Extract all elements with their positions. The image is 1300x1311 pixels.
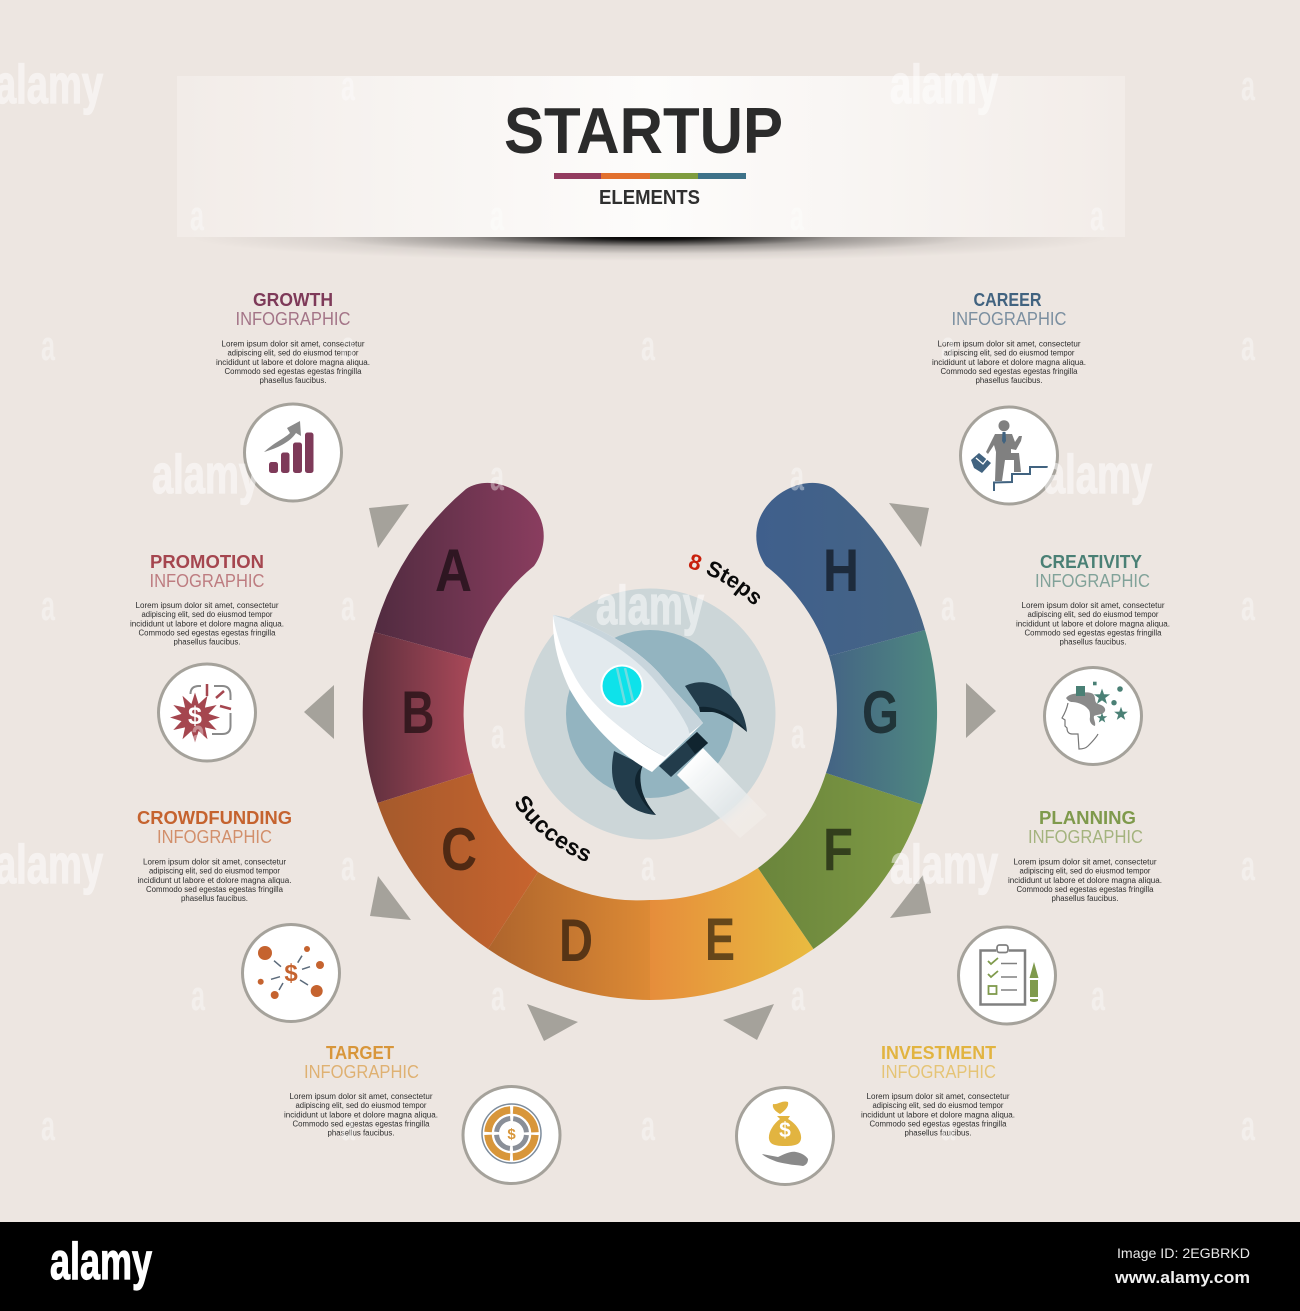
text block (130, 601, 284, 647)
image id: Image ID: 2EGBRKD (1117, 1245, 1250, 1261)
text block: Lorem ipsum dolor sit amet, consectetur (938, 340, 1081, 348)
heading: crowdfunding (137, 808, 292, 847)
text block: Lorem ipsum dolor sit amet, consectetur (1014, 858, 1157, 866)
watermarks: a (1241, 1102, 1255, 1149)
heading: growth (236, 290, 350, 329)
panel: investment (736, 1043, 1015, 1184)
icon: creative head (1044, 668, 1142, 764)
title: STARTUP (504, 94, 783, 167)
watermarks: a (790, 192, 804, 239)
icon: crowdfunding network: $ (284, 960, 298, 987)
text block: phasellus faucibus. (976, 376, 1042, 385)
banner panel (177, 76, 1125, 237)
lower fin (612, 751, 656, 815)
heading: creativity: CREATIVITY (1040, 552, 1142, 572)
watermarks: a (41, 1102, 55, 1149)
header banner (177, 76, 1125, 261)
icon: promotion burst: $ (188, 702, 202, 730)
heading: planning (1028, 808, 1143, 847)
watermarks: a (341, 322, 355, 369)
panel: career (932, 290, 1086, 504)
watermarks: a (941, 322, 955, 369)
curved label: Success: Success (516, 796, 590, 861)
colour bar (554, 173, 746, 179)
watermarks: a (1091, 972, 1105, 1019)
watermarks: a (191, 710, 205, 757)
text block: adipiscing elit, sed do eiusmod tempor (296, 1101, 427, 1110)
text block: phasellus faucibus. (1052, 894, 1118, 903)
inner disc (566, 630, 734, 798)
text block: Lorem ipsum dolor sit amet, consectetur (222, 340, 365, 348)
heading: planning: PLANNING (1039, 808, 1136, 828)
text block: incididunt ut labore et dolore magna aliqua. (1016, 619, 1170, 628)
heading: promotion: INFOGRAPHIC (150, 571, 264, 591)
letters: D (559, 907, 593, 974)
heading: investment: INFOGRAPHIC (881, 1062, 996, 1082)
text block: Commodo sed egestas egestas fringilla (224, 367, 362, 376)
text block: Commodo sed egestas egestas fringilla (292, 1120, 430, 1128)
panel: creativity (1016, 552, 1170, 764)
text block: phasellus faucibus. (174, 638, 240, 647)
watermarks: a (1241, 842, 1255, 889)
watermarks: a (1090, 192, 1104, 239)
nozzle (659, 732, 708, 777)
icon: clipboard (958, 927, 1056, 1024)
heading: target: TARGET (326, 1043, 394, 1063)
ring chart (363, 483, 937, 1000)
icon: money bag (736, 1088, 834, 1184)
letters: C (441, 816, 477, 883)
segment A (374, 483, 544, 659)
upper fin (685, 682, 747, 732)
heading: target (304, 1043, 419, 1082)
text block: phasellus faucibus. (1060, 638, 1126, 647)
heading: crowdfunding: CROWDFUNDING (137, 808, 292, 828)
heading: promotion: PROMOTION (150, 552, 264, 572)
footer bar (0, 1222, 1300, 1311)
outer disc (524, 588, 776, 840)
body shade (553, 615, 703, 757)
heading: growth: INFOGRAPHIC (236, 309, 350, 329)
panel: growth (216, 290, 370, 501)
watermarks: alamy (596, 574, 704, 636)
footer logo: alamy (50, 1233, 152, 1291)
icon: target: $ (507, 1126, 516, 1143)
text block (216, 340, 370, 385)
body face (553, 615, 690, 757)
watermarks: a (41, 322, 55, 369)
text block (1016, 601, 1170, 647)
text block: incididunt ut labore et dolore magna aliqua. (130, 619, 284, 628)
segment F (758, 773, 922, 949)
heading: creativity: INFOGRAPHIC (1035, 571, 1150, 591)
icon: career climb (960, 407, 1058, 504)
watermarks: a (791, 972, 805, 1019)
text block: adipiscing elit, sed do eiusmod tempor (944, 349, 1075, 358)
text block: Lorem ipsum dolor sit amet, consectetur (866, 1092, 1010, 1101)
text block: Commodo sed egestas egestas fringilla (1016, 885, 1154, 894)
watermarks: a (491, 710, 505, 757)
letters: H (823, 537, 859, 604)
text block: incididunt ut labore et dolore magna aliqua. (138, 876, 292, 885)
arrows (304, 503, 996, 1041)
icon: target (463, 1086, 560, 1184)
watermarks: a (341, 582, 355, 629)
watermarks: a (41, 582, 55, 629)
icon: growth chart (244, 404, 342, 501)
watermarks: a (790, 452, 804, 499)
icon: money bag: $ (779, 1119, 791, 1142)
heading: creativity (1035, 552, 1150, 591)
watermarks: a (341, 62, 355, 109)
text block (284, 1092, 438, 1138)
letters: B (402, 679, 434, 746)
website: www.alamy.com (1114, 1268, 1250, 1287)
text block: incididunt ut labore et dolore magna aliqua. (932, 358, 1086, 367)
text block: Commodo sed egestas egestas fringilla (870, 1120, 1007, 1128)
watermarks: a (641, 1102, 655, 1149)
text block: Commodo sed egestas egestas fringilla (1024, 628, 1162, 638)
heading: career: CAREER (974, 290, 1042, 310)
watermarks: alamy (152, 443, 260, 505)
text block: incididunt ut labore et dolore magna aliqua. (216, 358, 370, 367)
watermarks: a (191, 972, 205, 1019)
heading: career (952, 290, 1066, 329)
watermarks: a (341, 842, 355, 889)
watermarks: alamy (890, 833, 998, 895)
curved label: 8 Steps: 8 Steps (688, 554, 760, 604)
icon: crowdfunding network (242, 924, 340, 1022)
panel: planning (958, 808, 1162, 1024)
text block (138, 858, 292, 903)
heading: target: INFOGRAPHIC (304, 1062, 419, 1082)
heading: investment (881, 1043, 996, 1082)
watermarks: a (491, 972, 505, 1019)
letters: E (705, 906, 735, 973)
banner shadow (190, 237, 1110, 261)
watermarks: a (190, 192, 204, 239)
segment H (756, 483, 925, 656)
watermarks: a (941, 1102, 955, 1149)
text block: Commodo sed egestas egestas fringilla (146, 885, 284, 894)
porthole (600, 664, 644, 708)
watermarks: a (490, 452, 504, 499)
text block (1008, 858, 1162, 903)
text block: adipiscing elit, sed do eiusmod tempor (142, 610, 273, 619)
letters (402, 537, 899, 974)
text block: phasellus faucibus. (260, 376, 326, 385)
watermarks: a (941, 582, 955, 629)
text block: incididunt ut labore et dolore magna aliqua. (861, 1110, 1015, 1119)
text block: Lorem ipsum dolor sit amet, consectetur (136, 601, 279, 610)
watermarks: a (791, 710, 805, 757)
segment E (650, 868, 814, 1000)
text block: Commodo sed egestas egestas fringilla (940, 367, 1078, 376)
text block: Lorem ipsum dolor sit amet, consectetur (1022, 601, 1165, 610)
letters: A (435, 537, 472, 604)
heading: growth: GROWTH (253, 290, 333, 310)
center rocket illustration (524, 588, 776, 840)
text block: adipiscing elit, sed do eiusmod tempor (872, 1101, 1004, 1110)
text block: phasellus faucibus. (328, 1129, 394, 1138)
letters: G (862, 679, 899, 746)
text block: adipiscing elit, sed do eiusmod tempor (1028, 610, 1159, 619)
heading: planning: INFOGRAPHIC (1028, 827, 1143, 847)
icon: promotion burst (158, 664, 256, 761)
flame (677, 748, 767, 838)
heading: crowdfunding: INFOGRAPHIC (157, 827, 272, 847)
watermarks: a (641, 322, 655, 369)
heading: career: INFOGRAPHIC (952, 309, 1066, 329)
text block: Commodo sed egestas egestas fringilla (138, 628, 276, 638)
watermarks: alamy (890, 53, 998, 115)
panel: promotion (130, 552, 284, 761)
watermarks: a (341, 1102, 355, 1149)
segment C (378, 773, 538, 949)
watermarks: a (490, 192, 504, 239)
watermarks: alamy (1044, 443, 1152, 505)
segment D (488, 872, 650, 1000)
text block: adipiscing elit, sed do eiusmod tempor (228, 349, 359, 358)
heading: promotion (150, 552, 264, 591)
watermarks: a (641, 842, 655, 889)
watermarks: a (1241, 62, 1255, 109)
segment G (826, 630, 937, 804)
text block: phasellus faucibus. (904, 1129, 972, 1138)
letters: F (823, 816, 853, 883)
text block (932, 340, 1086, 385)
text block: phasellus faucibus. (181, 894, 248, 903)
panel: target (284, 1043, 560, 1184)
text block: Lorem ipsum dolor sit amet, consectetur (143, 858, 286, 866)
text block (861, 1092, 1015, 1138)
watermarks: a (1241, 582, 1255, 629)
watermarks: a (1241, 322, 1255, 369)
subtitle: ELEMENTS (599, 187, 700, 209)
heading: investment: INVESTMENT (881, 1043, 996, 1063)
text block: incididunt ut labore et dolore magna aliqua. (284, 1110, 438, 1119)
text block: adipiscing elit, sed do eiusmod tempor (1020, 867, 1151, 876)
text block: adipiscing elit, sed do eiusmod tempor (149, 867, 280, 876)
panel: crowdfunding (137, 808, 340, 1022)
text block: incididunt ut labore et dolore magna aliqua. (1008, 876, 1162, 885)
text block: Lorem ipsum dolor sit amet, consectetur (290, 1092, 433, 1101)
rocket body (553, 615, 703, 772)
segment B (363, 632, 473, 803)
